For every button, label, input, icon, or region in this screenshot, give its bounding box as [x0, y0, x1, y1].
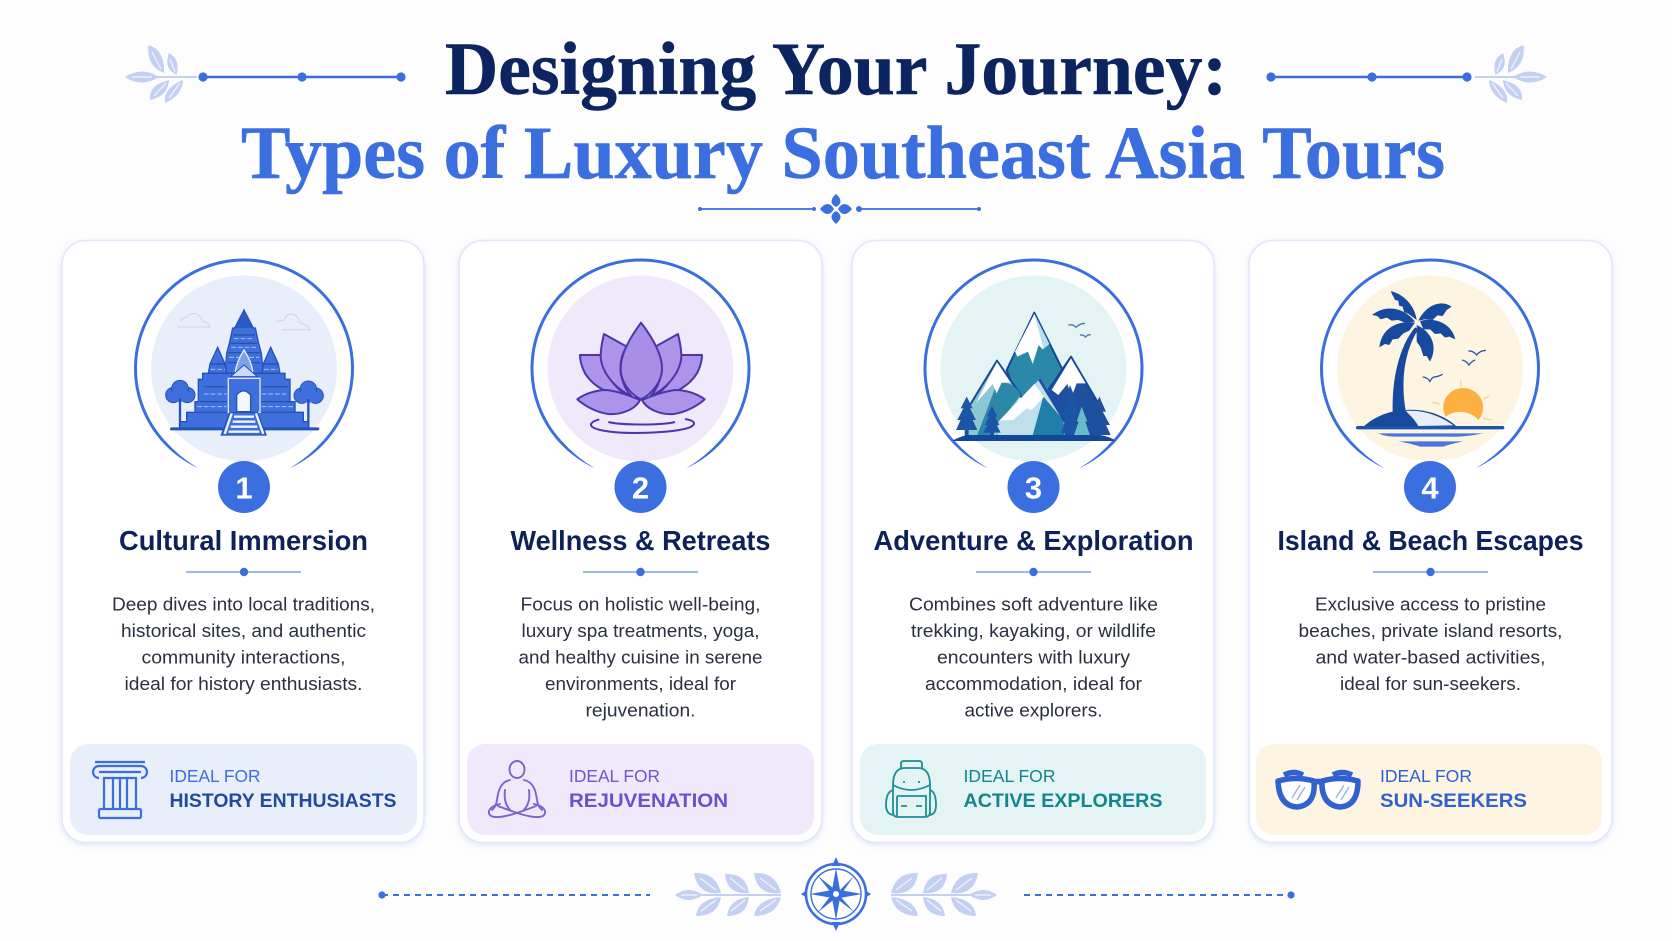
heading: Adventure & Exploration — [874, 525, 1194, 556]
icon: temple in circle — [136, 260, 352, 468]
description: and water-based activities, — [1316, 647, 1546, 667]
ideal-for pill: HISTORY ENTHUSIASTS — [170, 790, 396, 812]
description: luxury spa treatments, yoga, — [522, 621, 760, 641]
icon: backpack — [886, 761, 936, 817]
title: Designing Your Journey: — [445, 28, 1227, 111]
heading: Island & Beach Escapes — [1278, 525, 1584, 556]
divider — [583, 568, 698, 576]
description: environments, ideal for — [545, 674, 736, 694]
description: ideal for sun-seekers. — [1340, 674, 1521, 694]
ideal-for pill: IDEAL FOR — [1380, 766, 1472, 786]
right leaf sprig — [891, 873, 997, 916]
number badge 2 — [614, 461, 666, 513]
dashed line right — [1024, 891, 1295, 899]
number badge 4 — [1404, 461, 1456, 513]
panel: island and beach escapes — [1249, 240, 1612, 842]
heading: Cultural Immersion — [119, 525, 368, 556]
description — [518, 595, 762, 720]
ideal-for pill: REJUVENATION — [569, 790, 728, 812]
title underline ornament — [698, 194, 981, 224]
description: accommodation, ideal for — [925, 674, 1142, 694]
number badge 2: 2 — [632, 470, 649, 506]
icon: mountains in circle — [925, 260, 1142, 468]
description: encounters with luxury — [937, 647, 1130, 667]
ideal-for pill: IDEAL FOR — [569, 766, 660, 786]
footer ornament — [378, 857, 1295, 931]
heading: Wellness & Retreats — [510, 525, 770, 556]
title: Types of Luxury Southeast Asia Tours — [241, 112, 1445, 195]
left leaf sprig — [675, 873, 781, 916]
description: beaches, private island resorts, — [1298, 621, 1562, 641]
panel: cultural immersion — [62, 240, 424, 842]
title — [241, 28, 1445, 195]
ideal-for pill: ACTIVE EXPLORERS — [964, 790, 1162, 812]
ideal-for pill — [467, 744, 814, 835]
right title ornament — [1266, 45, 1547, 103]
description: active explorers. — [964, 700, 1102, 720]
left title ornament — [125, 45, 406, 103]
description — [112, 595, 375, 694]
icon: sunglasses — [1278, 772, 1358, 807]
divider — [1373, 568, 1488, 576]
description: ideal for history enthusiasts. — [124, 674, 362, 694]
panel: adventure and exploration — [852, 240, 1214, 842]
ideal-for pill: SUN-SEEKERS — [1380, 790, 1527, 812]
number badge 3: 3 — [1025, 470, 1042, 506]
description: and healthy cuisine in serene — [518, 647, 762, 667]
ideal-for pill — [1256, 744, 1602, 835]
number badge 1 — [218, 461, 270, 513]
divider — [976, 568, 1091, 576]
panel: wellness and retreats — [459, 240, 822, 842]
ideal-for pill: IDEAL FOR — [964, 766, 1056, 786]
icon: lotus in circle — [532, 260, 749, 468]
icon: palm island in circle — [1322, 260, 1538, 468]
description — [909, 595, 1158, 720]
description: trekking, kayaking, or wildlife — [911, 621, 1156, 641]
ideal-for pill — [70, 744, 417, 835]
icon: column — [93, 762, 147, 818]
ideal-for pill — [860, 744, 1206, 835]
dashed line left — [378, 891, 650, 899]
number badge 1: 1 — [235, 470, 253, 506]
description — [1298, 595, 1562, 694]
description: community interactions, — [142, 647, 346, 667]
number badge 4: 4 — [1421, 470, 1439, 506]
description: Focus on holistic well-being, — [520, 595, 760, 615]
description: rejuvenation. — [586, 700, 696, 720]
description: Exclusive access to pristine — [1315, 595, 1546, 615]
description: historical sites, and authentic — [121, 621, 366, 641]
icon: meditating person — [489, 761, 545, 817]
number badge 3 — [1008, 461, 1060, 513]
divider — [186, 568, 301, 576]
description: Deep dives into local traditions, — [112, 595, 375, 615]
ideal-for pill: IDEAL FOR — [170, 766, 260, 786]
icon: compass — [801, 857, 871, 931]
description: Combines soft adventure like — [909, 595, 1158, 615]
